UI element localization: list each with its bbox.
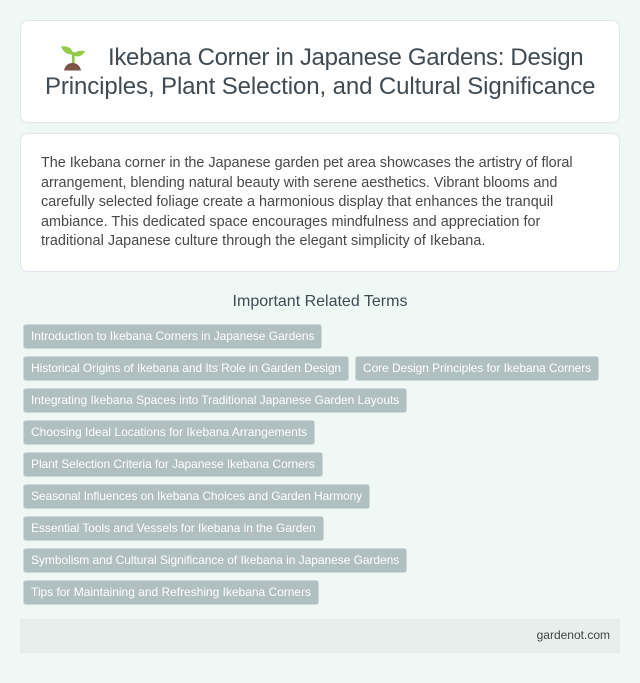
tag 1: Introduction to Ikebana Corners in Japanese Gardens [31, 329, 314, 343]
tag 2 [23, 356, 349, 381]
tag 8 [23, 516, 324, 541]
tag 7: Seasonal Influences on Ikebana Choices and Garden Harmony [31, 489, 362, 503]
title: Principles, Plant Selection, and Cultural Significance [45, 73, 595, 100]
title card [20, 20, 620, 123]
title: Ikebana Corner in Japanese Gardens: Design [108, 44, 583, 71]
tag 10: Tips for Maintaining and Refreshing Ikebana Corners [31, 585, 311, 599]
footer: gardenot.com [537, 628, 610, 642]
icon: seedling [61, 46, 85, 70]
section heading: Important Related Terms [233, 293, 407, 310]
tag 5 [23, 420, 315, 445]
tag 3: Core Design Principles for Ikebana Corners [363, 361, 591, 375]
tag 6: Plant Selection Criteria for Japanese Ikebana Corners [31, 457, 315, 471]
tag 5: Choosing Ideal Locations for Ikebana Arrangements [31, 425, 307, 439]
tag 10 [23, 580, 319, 605]
tag 4: Integrating Ikebana Spaces into Traditional Japanese Garden Layouts [31, 393, 399, 407]
tag 1 [23, 324, 322, 349]
title [45, 44, 595, 100]
tag 9 [23, 548, 407, 573]
intro paragraph: carefully selected foliage create a harmonious display that enhances the tranquil [41, 194, 553, 210]
tag 6 [23, 452, 323, 477]
tag 3 [355, 356, 599, 381]
footer [20, 619, 620, 653]
tag 9: Symbolism and Cultural Significance of Ikebana in Japanese Gardens [31, 553, 399, 567]
tag 2: Historical Origins of Ikebana and Its Role in Garden Design [31, 361, 341, 375]
intro paragraph: arrangement, blending natural beauty with serene aesthetics. Vibrant blooms and [41, 175, 557, 191]
tag 8: Essential Tools and Vessels for Ikebana in the Garden [31, 521, 316, 535]
intro paragraph: ambiance. This dedicated space encourages mindfulness and appreciation for [41, 214, 540, 230]
intro paragraph [41, 155, 573, 249]
intro paragraph: traditional Japanese culture through the elegant simplicity of Ikebana. [41, 233, 485, 249]
intro card [20, 133, 620, 272]
tag 7 [23, 484, 370, 509]
tag list [23, 324, 599, 605]
tag 4 [23, 388, 407, 413]
intro paragraph: The Ikebana corner in the Japanese garden pet area showcases the artistry of floral [41, 155, 573, 171]
